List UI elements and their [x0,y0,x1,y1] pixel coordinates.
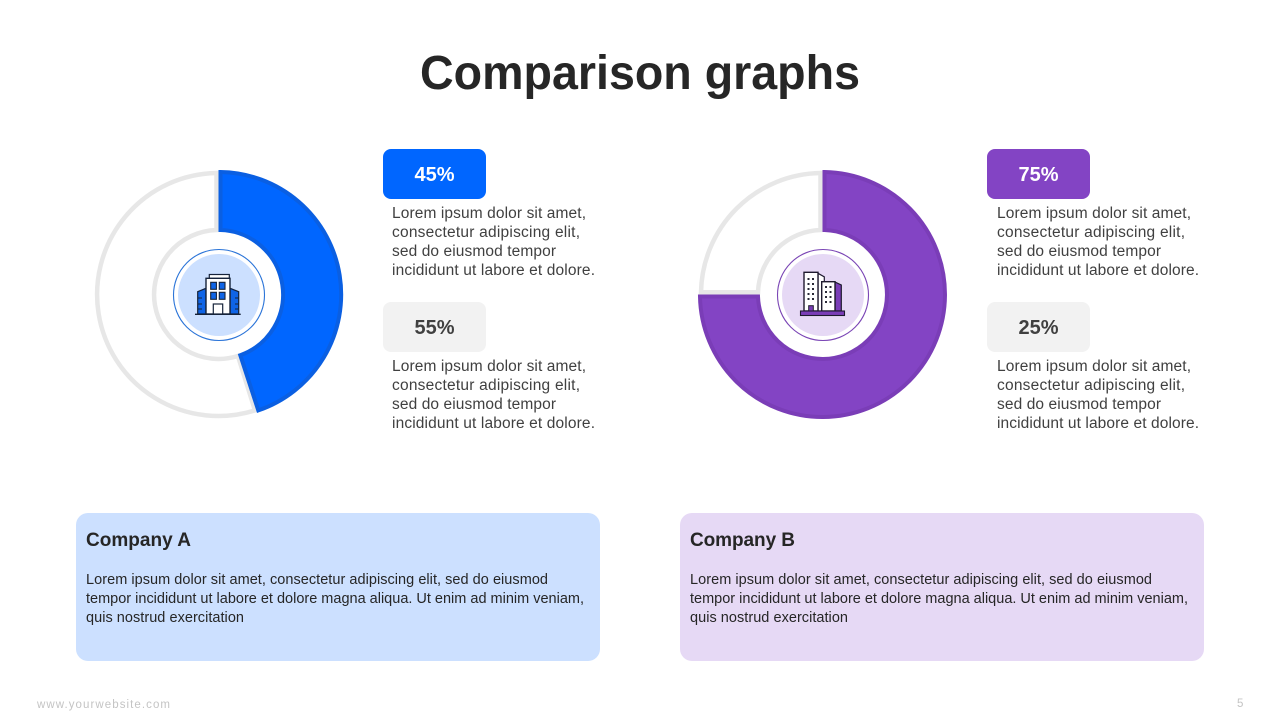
text block: sed do eiusmod tempor [392,396,556,413]
text block: quis nostrud exercitation [690,610,848,626]
title: Comparison graphs [420,47,860,100]
icon: office building in circle [174,250,264,340]
stat: Company A 55% [383,302,595,432]
text block: Lorem ipsum dolor sit amet, [392,205,586,222]
text block: sed do eiusmod tempor [392,243,556,260]
text block: consectetur adipiscing elit, [997,377,1185,394]
footer: website: www.yourwebsite.com [36,699,170,711]
text block [690,572,1188,626]
text block: quis nostrud exercitation [86,610,244,626]
stat: Company B 25%: 25% [1018,317,1059,339]
stat: Company A 55%: 55% [414,317,455,339]
icon: city towers in circle [778,250,868,340]
text block: Lorem ipsum dolor sit amet, consectetur adipiscing elit, sed do eiusmod [690,572,1152,588]
text block [392,205,595,279]
stat: Company B 75%: 75% [1018,164,1059,186]
text block: tempor incididunt ut labore et dolore magna aliqua. Ut enim ad minim veniam, [86,591,584,607]
panel: Company B [680,513,1204,661]
text block: Lorem ipsum dolor sit amet, [997,205,1191,222]
badge: 75% [987,149,1090,199]
text block: consectetur adipiscing elit, [997,224,1185,241]
donut chart: Company B [700,172,945,417]
text block: Lorem ipsum dolor sit amet, [392,358,586,375]
text block: sed do eiusmod tempor [997,243,1161,260]
heading: Company B: Company B [690,530,795,551]
text block [392,358,595,432]
text block [997,358,1199,432]
badge: 45% [383,149,486,199]
badge: 55% [383,302,486,352]
stat: Company A 45% [383,149,595,279]
segment: 45% blue [220,172,341,410]
segment: 25% remainder [701,173,820,292]
text block: tempor incididunt ut labore et dolore magna aliqua. Ut enim ad minim veniam, [690,591,1188,607]
text block [997,205,1199,279]
text block: Lorem ipsum dolor sit amet, consectetur adipiscing elit, sed do eiusmod [86,572,548,588]
stat: Company B 75% [987,149,1199,279]
text block [86,572,584,626]
segment: 75% purple [700,172,945,417]
segment: 55% remainder [97,173,255,416]
text block: Lorem ipsum dolor sit amet, [997,358,1191,375]
text block: consectetur adipiscing elit, [392,224,580,241]
text block: consectetur adipiscing elit, [392,377,580,394]
donut chart: Company A [97,172,341,416]
panel: Company A [76,513,600,661]
stat: Company A 45%: 45% [414,164,455,186]
text block: incididunt ut labore et dolore. [997,262,1199,279]
badge: 25% [987,302,1090,352]
heading: Company A: Company A [86,530,191,551]
stat: Company B 25% [987,302,1199,432]
footer: page number: 5 [1237,698,1243,710]
text block: incididunt ut labore et dolore. [997,415,1199,432]
text block: incididunt ut labore et dolore. [392,262,595,279]
text block: sed do eiusmod tempor [997,396,1161,413]
text block: incididunt ut labore et dolore. [392,415,595,432]
